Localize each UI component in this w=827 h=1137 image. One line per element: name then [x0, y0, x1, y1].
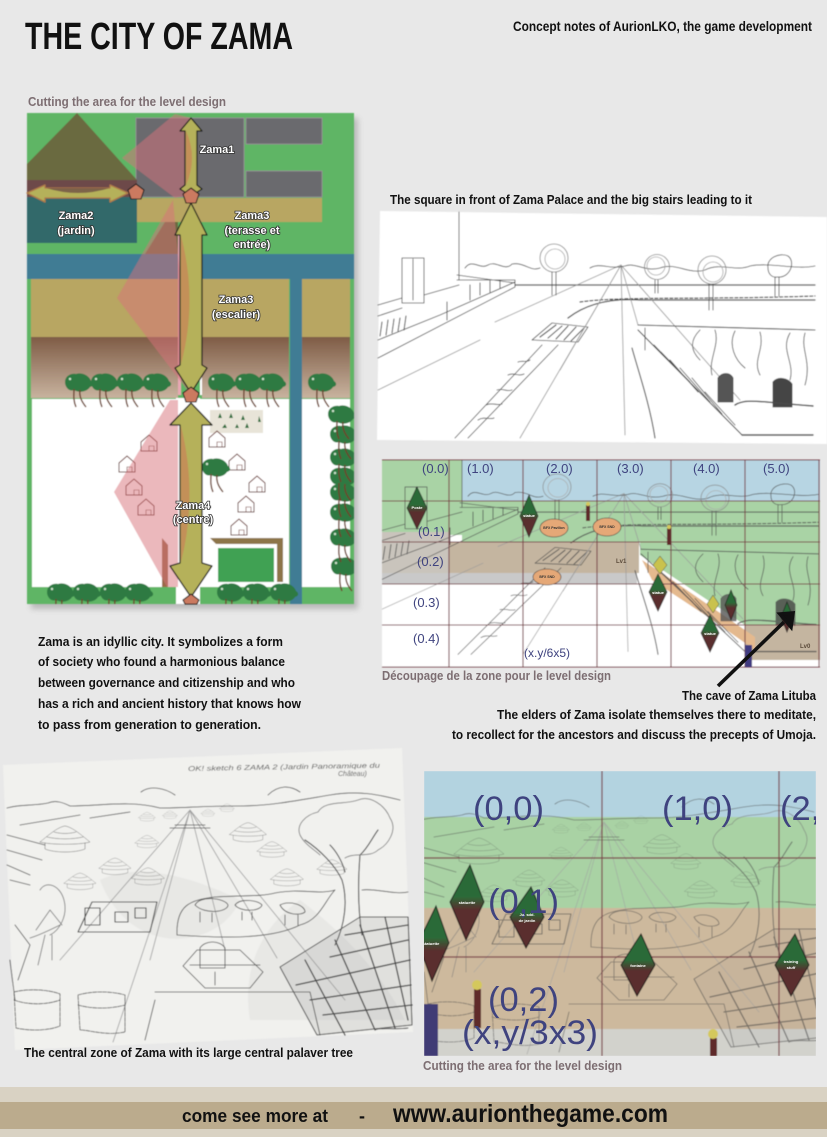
- map base: [27, 113, 354, 604]
- diamond markers: [407, 487, 793, 652]
- footer band: [0, 1087, 827, 1137]
- grid coordinates: (x,y/3x3): [462, 1014, 598, 1052]
- zone labels: (centre): [173, 514, 214, 526]
- zone labels: Zama1: [200, 144, 234, 156]
- marker small labels: statuette: [459, 900, 476, 905]
- grid coordinates: [413, 461, 790, 660]
- poles: [586, 502, 671, 545]
- sketch underlay: [421, 799, 826, 1054]
- footer text: come see more at: come see more at: [182, 1106, 328, 1126]
- marker small labels: Ju. sdd.: [519, 912, 535, 917]
- marker small labels: stuff: [787, 965, 796, 970]
- zone labels: Zama3: [219, 294, 253, 306]
- title: THE CITY OF ZAMA: [25, 16, 293, 58]
- zone labels: (terasse et: [224, 225, 280, 237]
- waypoint pentagons: [128, 184, 199, 604]
- panel: pencil sketch of the square: [377, 211, 827, 444]
- heading: map caption: Cutting the area for the level design: [28, 94, 226, 109]
- marker small labels: de jardin: [519, 918, 536, 923]
- garden plants patch: [210, 410, 263, 433]
- grid coordinates: (4.0): [693, 461, 720, 476]
- arrow pointing at cave: [718, 613, 793, 686]
- text block: description of Zama: [38, 634, 302, 732]
- caption: square sketch: The square in front of Zama Palace and the big stairs leading to it: [390, 192, 753, 207]
- text block: description of Zama: between governance and citizenship and who: [38, 675, 295, 690]
- zone labels: Zama3: [235, 210, 269, 222]
- tree rows: [47, 373, 359, 617]
- zone labels: [57, 144, 280, 526]
- panel: level grid over square sketch: [381, 444, 820, 667]
- handwritten sketch note: OK! sketch 6 ZAMA 2 (Jardin Panoramique du: [188, 763, 380, 773]
- text block: description of Zama: has a rich and ancient history that knows how: [38, 696, 302, 711]
- marker small labels: Lv0: [800, 644, 811, 650]
- marker small labels: Lv1: [616, 559, 627, 565]
- panel: level map of Zama: [27, 113, 359, 617]
- grid coordinates: (0,2): [488, 981, 559, 1019]
- grid coordinates: [462, 790, 820, 1052]
- garden zone: [27, 113, 178, 254]
- footer URL: www.aurionthegame.com: [392, 1100, 668, 1128]
- grid coordinates: (2,: [780, 790, 820, 828]
- text block: description of Zama: to pass from generation to generation.: [38, 717, 261, 732]
- marker small labels: BFX SND: [599, 525, 615, 529]
- grid coordinates: (0,1): [488, 883, 559, 921]
- marker small labels: [412, 505, 811, 650]
- zone colour fills: [382, 460, 820, 667]
- grid coordinates: (2.0): [546, 461, 573, 476]
- blue canal band: [27, 254, 354, 604]
- navy marker: [745, 645, 752, 667]
- yellow markers: [653, 556, 719, 613]
- caption: central zone: The central zone of Zama with its large central palaver tree: [24, 1045, 353, 1060]
- red grid lines: [382, 460, 820, 667]
- marker small labels: statue: [652, 590, 665, 595]
- marker small labels: statuette: [423, 941, 440, 946]
- translucent camera cones: [114, 114, 198, 587]
- grid coordinates: (3.0): [617, 461, 644, 476]
- terrace: [136, 198, 322, 222]
- zone labels: entrée): [234, 239, 271, 251]
- gameplay ovals: [533, 518, 621, 585]
- caption: central grid: Cutting the area for the level design: [423, 1058, 622, 1073]
- village huts: [119, 431, 265, 535]
- text block: description of Zama: Zama is an idyllic city. It symbolizes a form: [38, 634, 283, 649]
- grid coordinates: (0.4): [413, 631, 440, 646]
- grid coordinates: (x.y/6x5): [524, 646, 570, 660]
- diamond markers: [418, 865, 809, 996]
- grid coordinates: (1.0): [467, 461, 494, 476]
- grid coordinates: (0.2): [417, 554, 444, 569]
- grid coordinates: (1,0): [662, 790, 733, 828]
- marker small labels: statue: [523, 513, 536, 518]
- marker small labels: statue: [704, 631, 717, 636]
- text block: description of Zama: of society who found a harmonious balance: [38, 654, 285, 669]
- marker small labels: [423, 900, 799, 970]
- zone labels: (jardin): [57, 225, 95, 237]
- marker small labels: Poste: [412, 505, 423, 510]
- navy marker: [424, 1004, 438, 1056]
- grid coordinates: (0.3): [413, 595, 440, 610]
- footer dash: -: [359, 1106, 365, 1126]
- marker small labels: training: [784, 959, 799, 964]
- text block: cave of Zama Lituba: [452, 688, 817, 742]
- handwritten sketch note second line: Château): [338, 771, 367, 778]
- panel: pencil sketch of central zone: [3, 748, 413, 1050]
- panel: level grid over central zone: [418, 771, 826, 1056]
- yellow-green path arrows: [27, 118, 212, 597]
- red grid lines: [424, 771, 816, 1056]
- small courtyard: [162, 538, 283, 587]
- grid coordinates: (5.0): [763, 461, 790, 476]
- sketch underlay: [381, 444, 818, 654]
- poles: [472, 980, 718, 1056]
- grid coordinates: (0,0): [473, 790, 544, 828]
- caption: level grid: Découpage de la zone pour le level design: [382, 668, 611, 683]
- marker small labels: BFX Pavillon: [543, 526, 565, 530]
- orange lens overlays on arrows: [46, 131, 192, 562]
- marker small labels: BFX SND: [539, 575, 555, 579]
- central zone white ground: [32, 398, 350, 604]
- marker small labels: fontaine: [630, 963, 647, 968]
- zone labels: (escalier): [212, 309, 260, 321]
- zone labels: Zama2: [59, 210, 93, 222]
- grid coordinates: (0.1): [418, 524, 445, 539]
- palace buildings: [136, 118, 322, 197]
- zone colour fills: [424, 771, 816, 1056]
- zone labels: Zama4: [176, 500, 211, 512]
- grid coordinates: (0.0): [422, 461, 449, 476]
- central stair strips: [178, 235, 202, 395]
- stairs zone: [31, 279, 350, 398]
